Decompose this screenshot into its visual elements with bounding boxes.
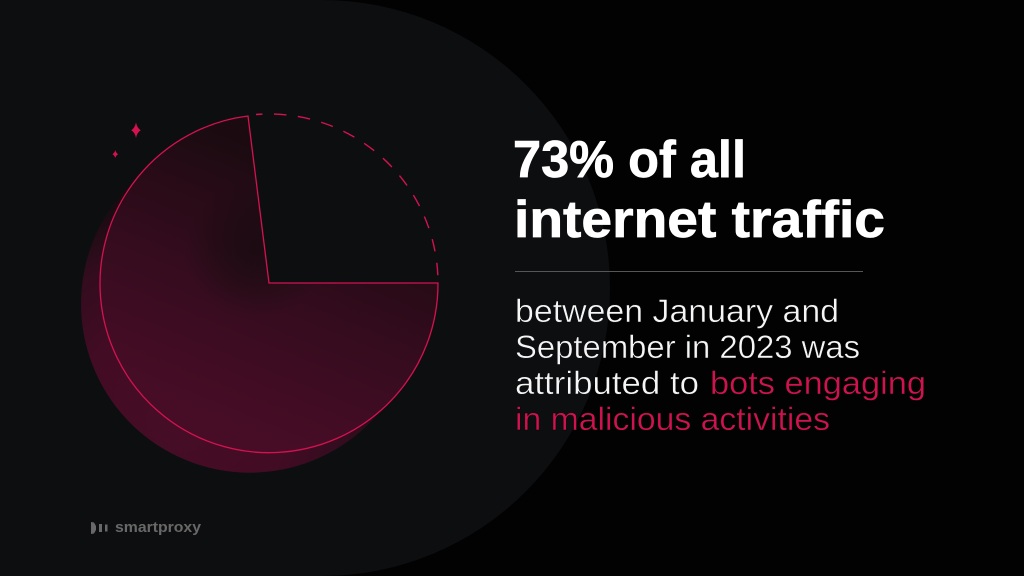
icon: small sparkle xyxy=(112,150,118,158)
body text: attributed to xyxy=(515,365,699,401)
heading xyxy=(513,131,885,249)
pie outline xyxy=(100,116,438,453)
logo: smartproxy xyxy=(91,519,202,536)
body text: September in 2023 was xyxy=(515,329,860,365)
body text: between January and xyxy=(515,293,839,329)
body text xyxy=(515,293,926,437)
divider xyxy=(515,271,863,272)
pie shadow xyxy=(81,136,419,473)
pie slice: 73 percent xyxy=(100,116,438,453)
heading: 73% of all xyxy=(513,131,746,189)
heading: internet traffic xyxy=(514,191,885,249)
highlighted text: in malicious activities xyxy=(515,401,830,437)
highlighted text: bots engaging xyxy=(710,365,926,401)
highlighted text xyxy=(515,365,926,437)
pie chart: 73 percent xyxy=(81,114,438,473)
logo icon xyxy=(91,522,108,534)
large background shape xyxy=(0,0,610,576)
pie inner shading xyxy=(100,116,438,453)
logo wordmark: smartproxy xyxy=(115,519,202,536)
dashed arc: remaining 27 percent xyxy=(256,114,438,283)
icon: large sparkle xyxy=(131,122,141,138)
